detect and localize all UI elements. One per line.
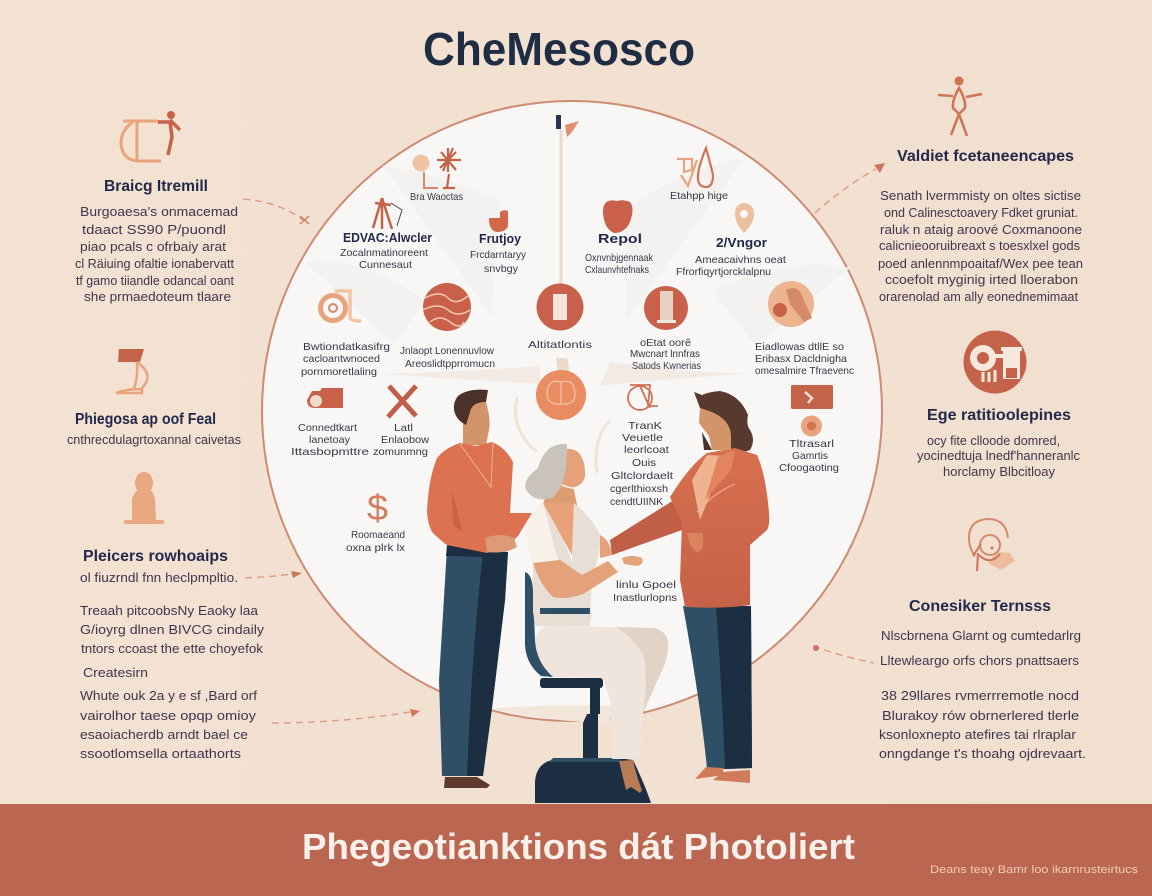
heading: Conesiker Ternsss (909, 598, 1051, 615)
icon: bust (124, 472, 164, 524)
body text: Burgoaesa's onmacemad (80, 205, 238, 219)
footer band (0, 804, 1152, 896)
body text (75, 205, 238, 304)
body text: tf gamo tiiandle odancal oant (76, 274, 235, 288)
icon: cross (388, 386, 416, 417)
item: Altitatlontis (528, 284, 592, 351)
body text: she prmaedoteum tlaare (84, 290, 231, 304)
body text: ond Calinesctoavery Fdket gruniat. (884, 206, 1078, 220)
item: EDVAC (340, 198, 432, 271)
label: Zocalnmatinoreent (340, 247, 428, 259)
body text: horclamy Blbcitloay (943, 465, 1056, 479)
label: Gamrtis (792, 450, 828, 462)
figure: standing man (427, 390, 532, 788)
body text: Whute ouk 2a y e sf ,Bard orf (80, 689, 258, 703)
legs (533, 612, 668, 759)
label: zomunmng (373, 446, 428, 458)
subheading: ol fiuzrndl fnn heclpmpltio. (80, 571, 238, 585)
label: cendtUIINK (610, 496, 663, 508)
foot (619, 760, 642, 793)
body text (917, 434, 1080, 479)
icon: stick figure (938, 76, 982, 136)
item: camera (291, 388, 369, 458)
arrow: top right (815, 163, 885, 213)
label: beside hands: Inastlurlopns (613, 592, 677, 604)
hand (485, 535, 517, 552)
body text: ccoefolt myginig irted lloerabon (885, 273, 1078, 287)
hair (454, 390, 488, 425)
icon: wheel (320, 291, 361, 321)
body text: esaoiacherdb arndt bael ce (80, 728, 248, 742)
heading: EDVAC:Alwcler (343, 230, 432, 245)
label: pornmoretlaling (301, 366, 377, 378)
heading: Valdiet fcetaneencapes (897, 148, 1074, 165)
blouse (692, 455, 727, 520)
label: Ameacaivhns oeat (695, 254, 786, 266)
item: Bra Waoctas (410, 148, 463, 203)
body text: Blurakoy rów obrnerlered tlerle (882, 709, 1079, 723)
label: cgerlthioxsh (610, 483, 668, 495)
subheading (880, 629, 1081, 668)
body text: yocinedtuja lnedf'hanneranlc (917, 449, 1080, 463)
shoes (444, 777, 490, 788)
label: beside hands: linlu Gpoel (616, 579, 676, 591)
body text: tntors ccoast the ette choyefok (81, 642, 264, 656)
heading: Pleicers rowhoaips (83, 548, 228, 565)
panel: middle left (67, 349, 241, 447)
paper (600, 556, 636, 573)
footer title: Phegeotianktions dát Photoliert (302, 826, 855, 867)
item: Frutjoy (470, 210, 527, 275)
body text: calicnieooruibreaxt s toesxlxel gods (879, 239, 1080, 253)
icon: document circle (536, 284, 584, 330)
chair (525, 572, 651, 803)
item: column circle (630, 286, 701, 372)
body text (878, 189, 1083, 304)
necklace (460, 443, 493, 487)
heading: Phiegosa ap oof Feal (75, 411, 216, 428)
label: Tltrasarl (789, 438, 834, 450)
body text: Senath lvermmisty on oltes sictise (880, 189, 1081, 203)
figure: standing woman (610, 391, 769, 783)
title: CheMesosco (423, 23, 695, 75)
label: Mwcnart lnnfras (630, 348, 700, 360)
body text: ssootlomsella ortaathorts (80, 747, 241, 761)
body text: onngdange t's thoahg ojdrevaart. (879, 747, 1086, 761)
heading: Ege ratitioolepines (927, 407, 1071, 424)
footer note: Deans teay Bamr loo ikarnrusteirtucs (930, 864, 1139, 876)
face (699, 408, 731, 450)
face (552, 449, 585, 490)
label: lanetoay (309, 434, 351, 446)
label: Eribasx Dacldnigha (755, 353, 847, 365)
panel: lower right (879, 519, 1086, 761)
label: Altitatlontis (528, 339, 592, 351)
belt (446, 545, 487, 557)
icon: tree and balloon (412, 148, 461, 188)
label: Frcdarntaryy (470, 249, 527, 261)
icon: box (791, 385, 833, 436)
label: Bra Waoctas (410, 191, 463, 203)
icon: apple (603, 200, 632, 233)
body text: raluk n ataig aroové Coxmanoone (880, 223, 1082, 237)
arm (533, 560, 618, 598)
label: Areoslidtpprromucn (405, 358, 495, 370)
shoes (695, 767, 750, 783)
label: Connedtkart (298, 422, 357, 434)
item: Repol (585, 200, 654, 276)
central circle panel (262, 101, 882, 723)
label: snvbgy (484, 263, 519, 275)
item: waves (400, 283, 495, 370)
arrow: lower right (813, 645, 874, 663)
icon: camera (307, 388, 343, 408)
body text: orarenolad am ally eonednemimaat (879, 290, 1079, 304)
label: oxna plrk lx (346, 542, 406, 554)
hands (622, 556, 642, 566)
trousers (439, 548, 508, 776)
icon: flask (677, 148, 713, 187)
lapel (697, 484, 735, 512)
label: Cunnesaut (359, 259, 412, 271)
label: beside hands (613, 579, 677, 604)
body text: tdaact SS90 P/puondl (82, 223, 226, 237)
label: omesalmire Tfraevenc (755, 365, 854, 377)
body text: poed anlennmpoaitaf/Wex pee tean (878, 257, 1083, 271)
item: box (779, 385, 839, 474)
body text: cl Räiuing ofaltie ionabervatt (75, 257, 235, 271)
label: oEtat oorê (640, 337, 691, 349)
icon: dial (628, 385, 658, 410)
label: Cfoogaoting (779, 462, 839, 474)
label: Oxnvnbjgennaak (585, 252, 654, 264)
icon: head in ring (969, 519, 1015, 571)
label: Bwtiondatkasifrg (303, 341, 390, 353)
icon: column circle (644, 286, 688, 330)
body text: cnthrecdulagrtoxannal caivetas (67, 433, 241, 447)
icon: peach circle (536, 358, 586, 420)
label: Veuetle (622, 432, 663, 444)
icon: waves circle (423, 283, 471, 331)
icon: round equipment (964, 330, 1026, 394)
neck and face (463, 402, 490, 445)
body text: 38 29llares rvmerrremotle nocd (881, 689, 1079, 703)
heading: Repol (598, 231, 642, 246)
label: Gltclordaelt (611, 470, 673, 482)
mask strap (560, 484, 583, 488)
figure: seated woman on chair (525, 444, 668, 803)
body text: piao pcals c ofrbaiy arat (80, 240, 227, 254)
item: dollar (346, 487, 406, 554)
torso (525, 503, 602, 618)
trousers (683, 606, 752, 769)
hair (525, 444, 567, 499)
item: light circle (755, 281, 854, 377)
body text: Createsirn (83, 666, 148, 680)
pin at top of circle (556, 115, 579, 137)
label: Latl (394, 422, 413, 434)
icon: desk and figure (121, 111, 180, 161)
label: cacloantwnoced (303, 353, 380, 365)
far arm (600, 535, 612, 558)
icon: light circle (768, 281, 814, 327)
item: Etahpp hige (670, 148, 728, 202)
body text: ksonloxnepto atefires tai rlraplar (879, 728, 1076, 742)
heading: Frutjoy (479, 231, 522, 246)
label: Roomaeand (351, 529, 405, 541)
label: leorlcoat (624, 444, 669, 456)
sleeve shadow (452, 490, 463, 533)
label: Ouis (632, 457, 656, 469)
heading: 2/Vngor (716, 235, 767, 250)
label: Satods Kwnerias (632, 360, 701, 372)
icon: easel (373, 198, 402, 229)
item: 2/Vngor (676, 203, 786, 278)
label: TranK (628, 420, 662, 432)
body text (80, 604, 265, 761)
body text (879, 689, 1086, 761)
icon: map pin (735, 203, 754, 233)
body text: vairolhor taese opqp omioy (80, 709, 257, 723)
icon: stand (116, 349, 147, 393)
item: wheel (301, 291, 390, 378)
panel: top right (878, 76, 1083, 304)
body text: ocy fite clloode domred, (927, 434, 1060, 448)
arrow: lower left 1 (245, 571, 302, 578)
arrow: top left (243, 199, 309, 224)
item: TranK (610, 385, 673, 508)
label: Ittasbopmttre (291, 446, 369, 458)
label: Cxlaunvhtefnaks (585, 264, 649, 276)
neck (543, 480, 577, 505)
label: Etahpp hige (670, 190, 728, 202)
heading: Braicg Itremill (104, 178, 208, 195)
label: Ffrorfiqyrtjorcklalpnu (676, 266, 771, 278)
subheading: Nlscbrnena Glarnt og cumtedarlrg (881, 629, 1081, 643)
subheading: Lltewleargo orfs chors pnattsaers (880, 654, 1079, 668)
jacket (670, 448, 769, 608)
arm reaching (610, 490, 705, 555)
label: Jnlaopt Lonennuvlow (400, 345, 494, 357)
panel: lower left (80, 472, 265, 761)
hand (687, 533, 703, 553)
panel: top left (75, 111, 238, 304)
hair (694, 391, 753, 452)
item: cross (373, 386, 429, 458)
body text: Treaah pitcoobsNy Eaoky laa (80, 604, 258, 618)
arrow: lower left 2 (272, 709, 420, 723)
icon: mug (489, 210, 508, 232)
torso and arm (427, 442, 532, 553)
panel: middle right (917, 330, 1080, 479)
label: Eiadlowas dtllE so (755, 341, 844, 353)
body text: G/ioyrg dlnen BIVCG cindaily (80, 623, 265, 637)
label: Enlaobow (381, 434, 429, 446)
icon: dollar: $ (367, 487, 388, 528)
